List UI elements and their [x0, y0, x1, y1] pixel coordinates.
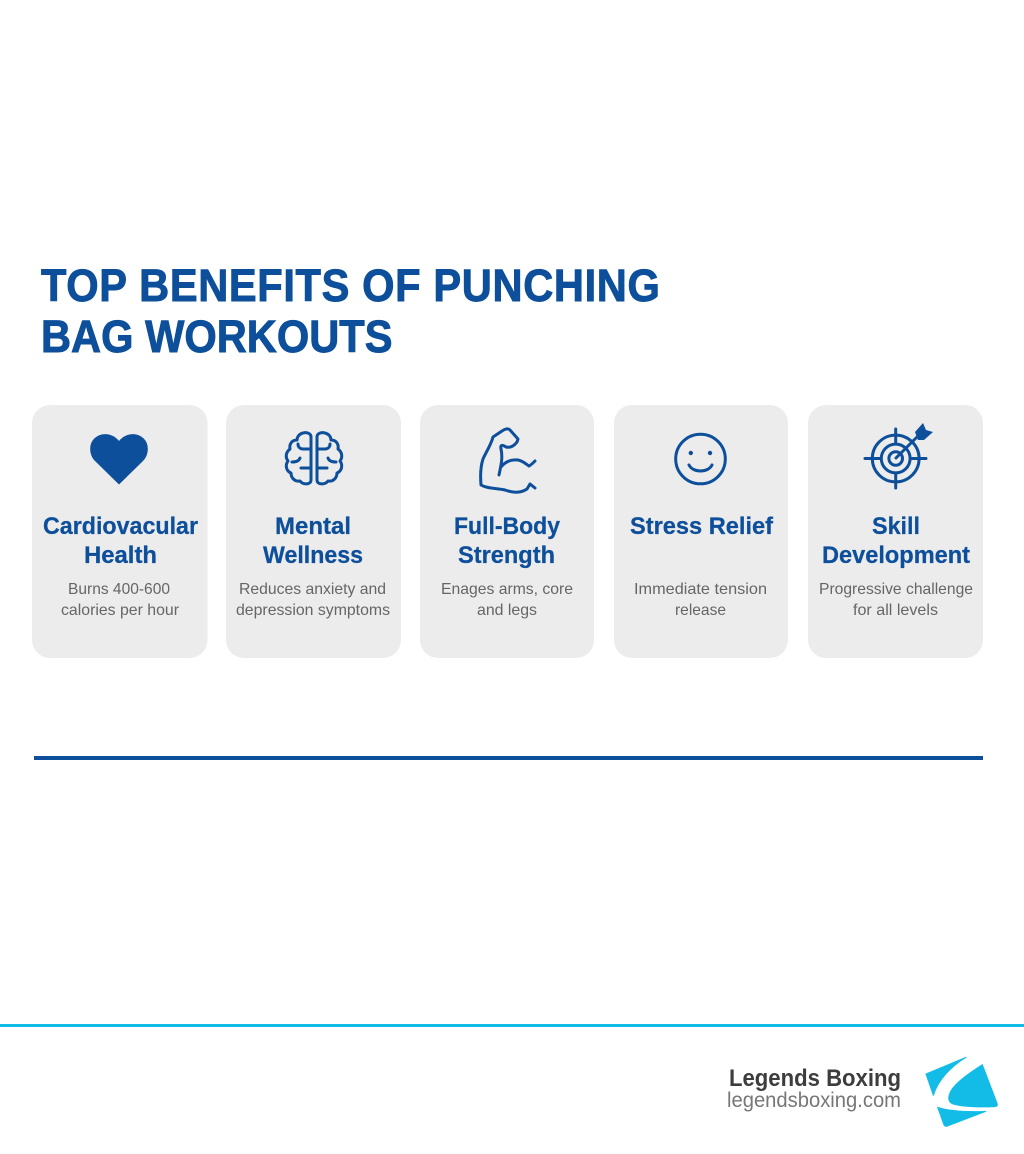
heading: skill development: Development — [822, 542, 970, 569]
panel: full-body strength — [420, 405, 594, 658]
heading: full-body strength — [454, 513, 561, 569]
text: tension: release — [675, 602, 726, 619]
icon: target with arrow — [865, 423, 933, 488]
panel: mental wellness — [226, 405, 401, 658]
heading: mental wellness: Mental — [275, 513, 351, 540]
text: calories — [61, 581, 180, 619]
title: BAG WORKOUTS — [41, 313, 393, 362]
heading: stress relief: Stress Relief — [630, 513, 774, 540]
heading: skill development — [822, 513, 970, 569]
text: tension: Immediate tension — [634, 581, 767, 598]
text: muscle groups: and legs — [477, 602, 537, 619]
panel: stress relief — [614, 405, 788, 658]
icon: smiley face — [676, 434, 725, 484]
heading: cardiovacular health — [43, 513, 198, 569]
text: calories: calories per hour — [61, 602, 180, 619]
heading: full-body strength: Full-Body — [454, 513, 561, 540]
text: progressive challenge — [819, 581, 973, 619]
panel: skill development — [808, 405, 983, 658]
icon: heart — [90, 434, 148, 484]
heading: full-body strength: Strength — [458, 542, 555, 569]
text: muscle groups — [441, 581, 573, 619]
heading: mental wellness — [263, 513, 363, 569]
text: tension — [634, 581, 767, 619]
heading: cardiovacular health: Cardiovacular — [43, 513, 198, 540]
title: TOP BENEFITS OF PUNCHING — [41, 262, 660, 311]
title — [41, 262, 660, 362]
icon: brain — [286, 433, 342, 484]
footer brand name: Legends Boxing — [729, 1065, 901, 1092]
text: progressive challenge: for all levels — [853, 602, 938, 619]
text: muscle groups: Enages arms, core — [441, 581, 573, 598]
heading: skill development: Skill — [872, 513, 920, 540]
text: anxiety — [236, 581, 390, 619]
logo — [926, 1057, 997, 1126]
text: calories: Burns 400-600 — [68, 581, 170, 598]
panel: cardiovascular health — [32, 405, 208, 658]
heading: cardiovacular health: Health — [84, 542, 157, 569]
heading: mental wellness: Wellness — [263, 542, 363, 569]
footer website: legendsboxing.com — [727, 1089, 901, 1112]
icon: flexed arm — [481, 429, 535, 492]
text: anxiety: Reduces anxiety and — [239, 581, 386, 598]
text: anxiety: depression symptoms — [236, 602, 390, 619]
text: progressive challenge: Progressive challenge — [819, 581, 973, 598]
